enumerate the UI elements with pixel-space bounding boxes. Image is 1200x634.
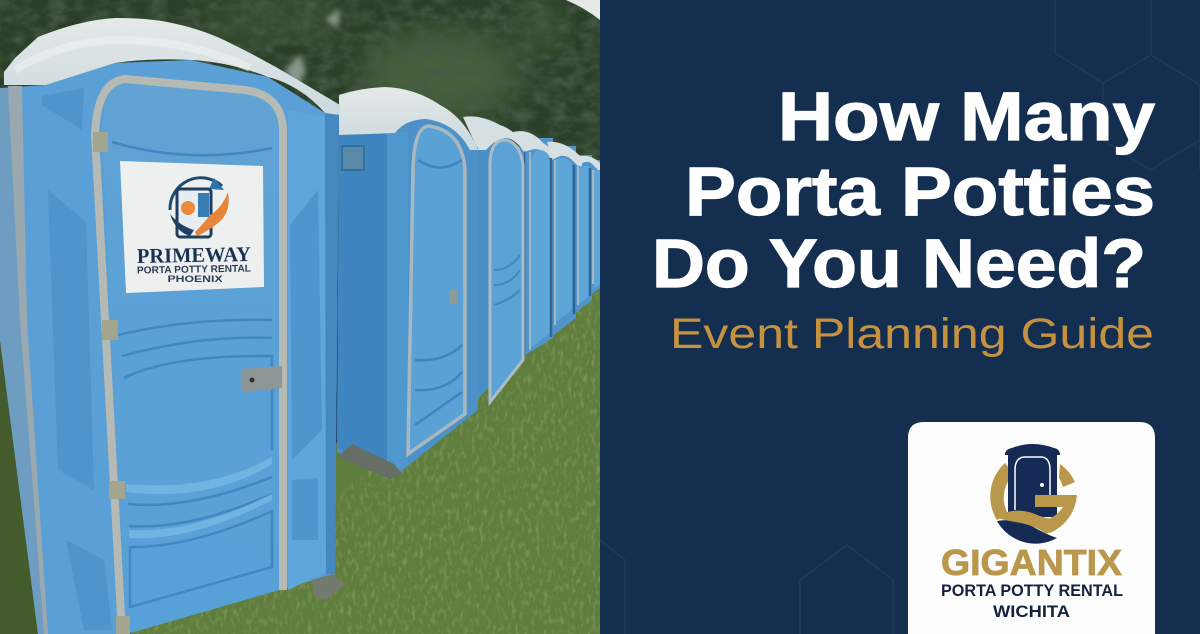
title line 2: Porta Potties xyxy=(685,153,1155,230)
hinges xyxy=(93,132,130,634)
door frame xyxy=(95,79,283,634)
brand location: WICHITA xyxy=(993,602,1070,621)
right door jamb xyxy=(288,110,330,590)
background trees xyxy=(0,0,600,320)
door latch xyxy=(241,366,282,392)
roof shading xyxy=(15,40,250,70)
corner column xyxy=(325,113,339,574)
sign location: PHOENIX xyxy=(168,274,222,284)
door panel xyxy=(102,83,279,634)
logo card xyxy=(908,422,1155,634)
sign logo xyxy=(170,178,229,237)
door embossing xyxy=(112,142,272,607)
door highlight bands xyxy=(126,457,272,538)
brand name: GIGANTIX xyxy=(941,542,1122,583)
brand service: PORTA POTTY RENTAL xyxy=(941,581,1123,600)
left corner strip xyxy=(8,86,48,634)
panel: navy title area xyxy=(600,0,1200,634)
body of front unit xyxy=(0,60,339,634)
door sign: Primeway xyxy=(120,161,264,293)
sign text: PRIMEWAY xyxy=(137,242,251,268)
left side panel xyxy=(0,88,46,634)
right jamb panels xyxy=(290,190,322,540)
card background xyxy=(908,422,1155,634)
subtitle: Event Planning Guide xyxy=(670,310,1154,358)
third porta potty xyxy=(463,116,528,404)
sign board xyxy=(120,161,264,293)
far porta potties in the row xyxy=(513,131,600,356)
panel: photo of porta potty row xyxy=(0,0,600,634)
title line 3: Do You Need? xyxy=(652,225,1146,302)
roof xyxy=(4,18,340,115)
title line 1: How Many xyxy=(778,78,1155,155)
title xyxy=(652,78,1155,302)
front porta potty xyxy=(0,18,345,634)
second porta potty xyxy=(337,87,478,479)
sign subtext: PORTA POTTY RENTAL xyxy=(137,264,251,276)
logo emblem xyxy=(990,444,1077,544)
grass lawn xyxy=(0,280,600,634)
foot block xyxy=(312,574,345,600)
left front panels xyxy=(42,88,112,630)
